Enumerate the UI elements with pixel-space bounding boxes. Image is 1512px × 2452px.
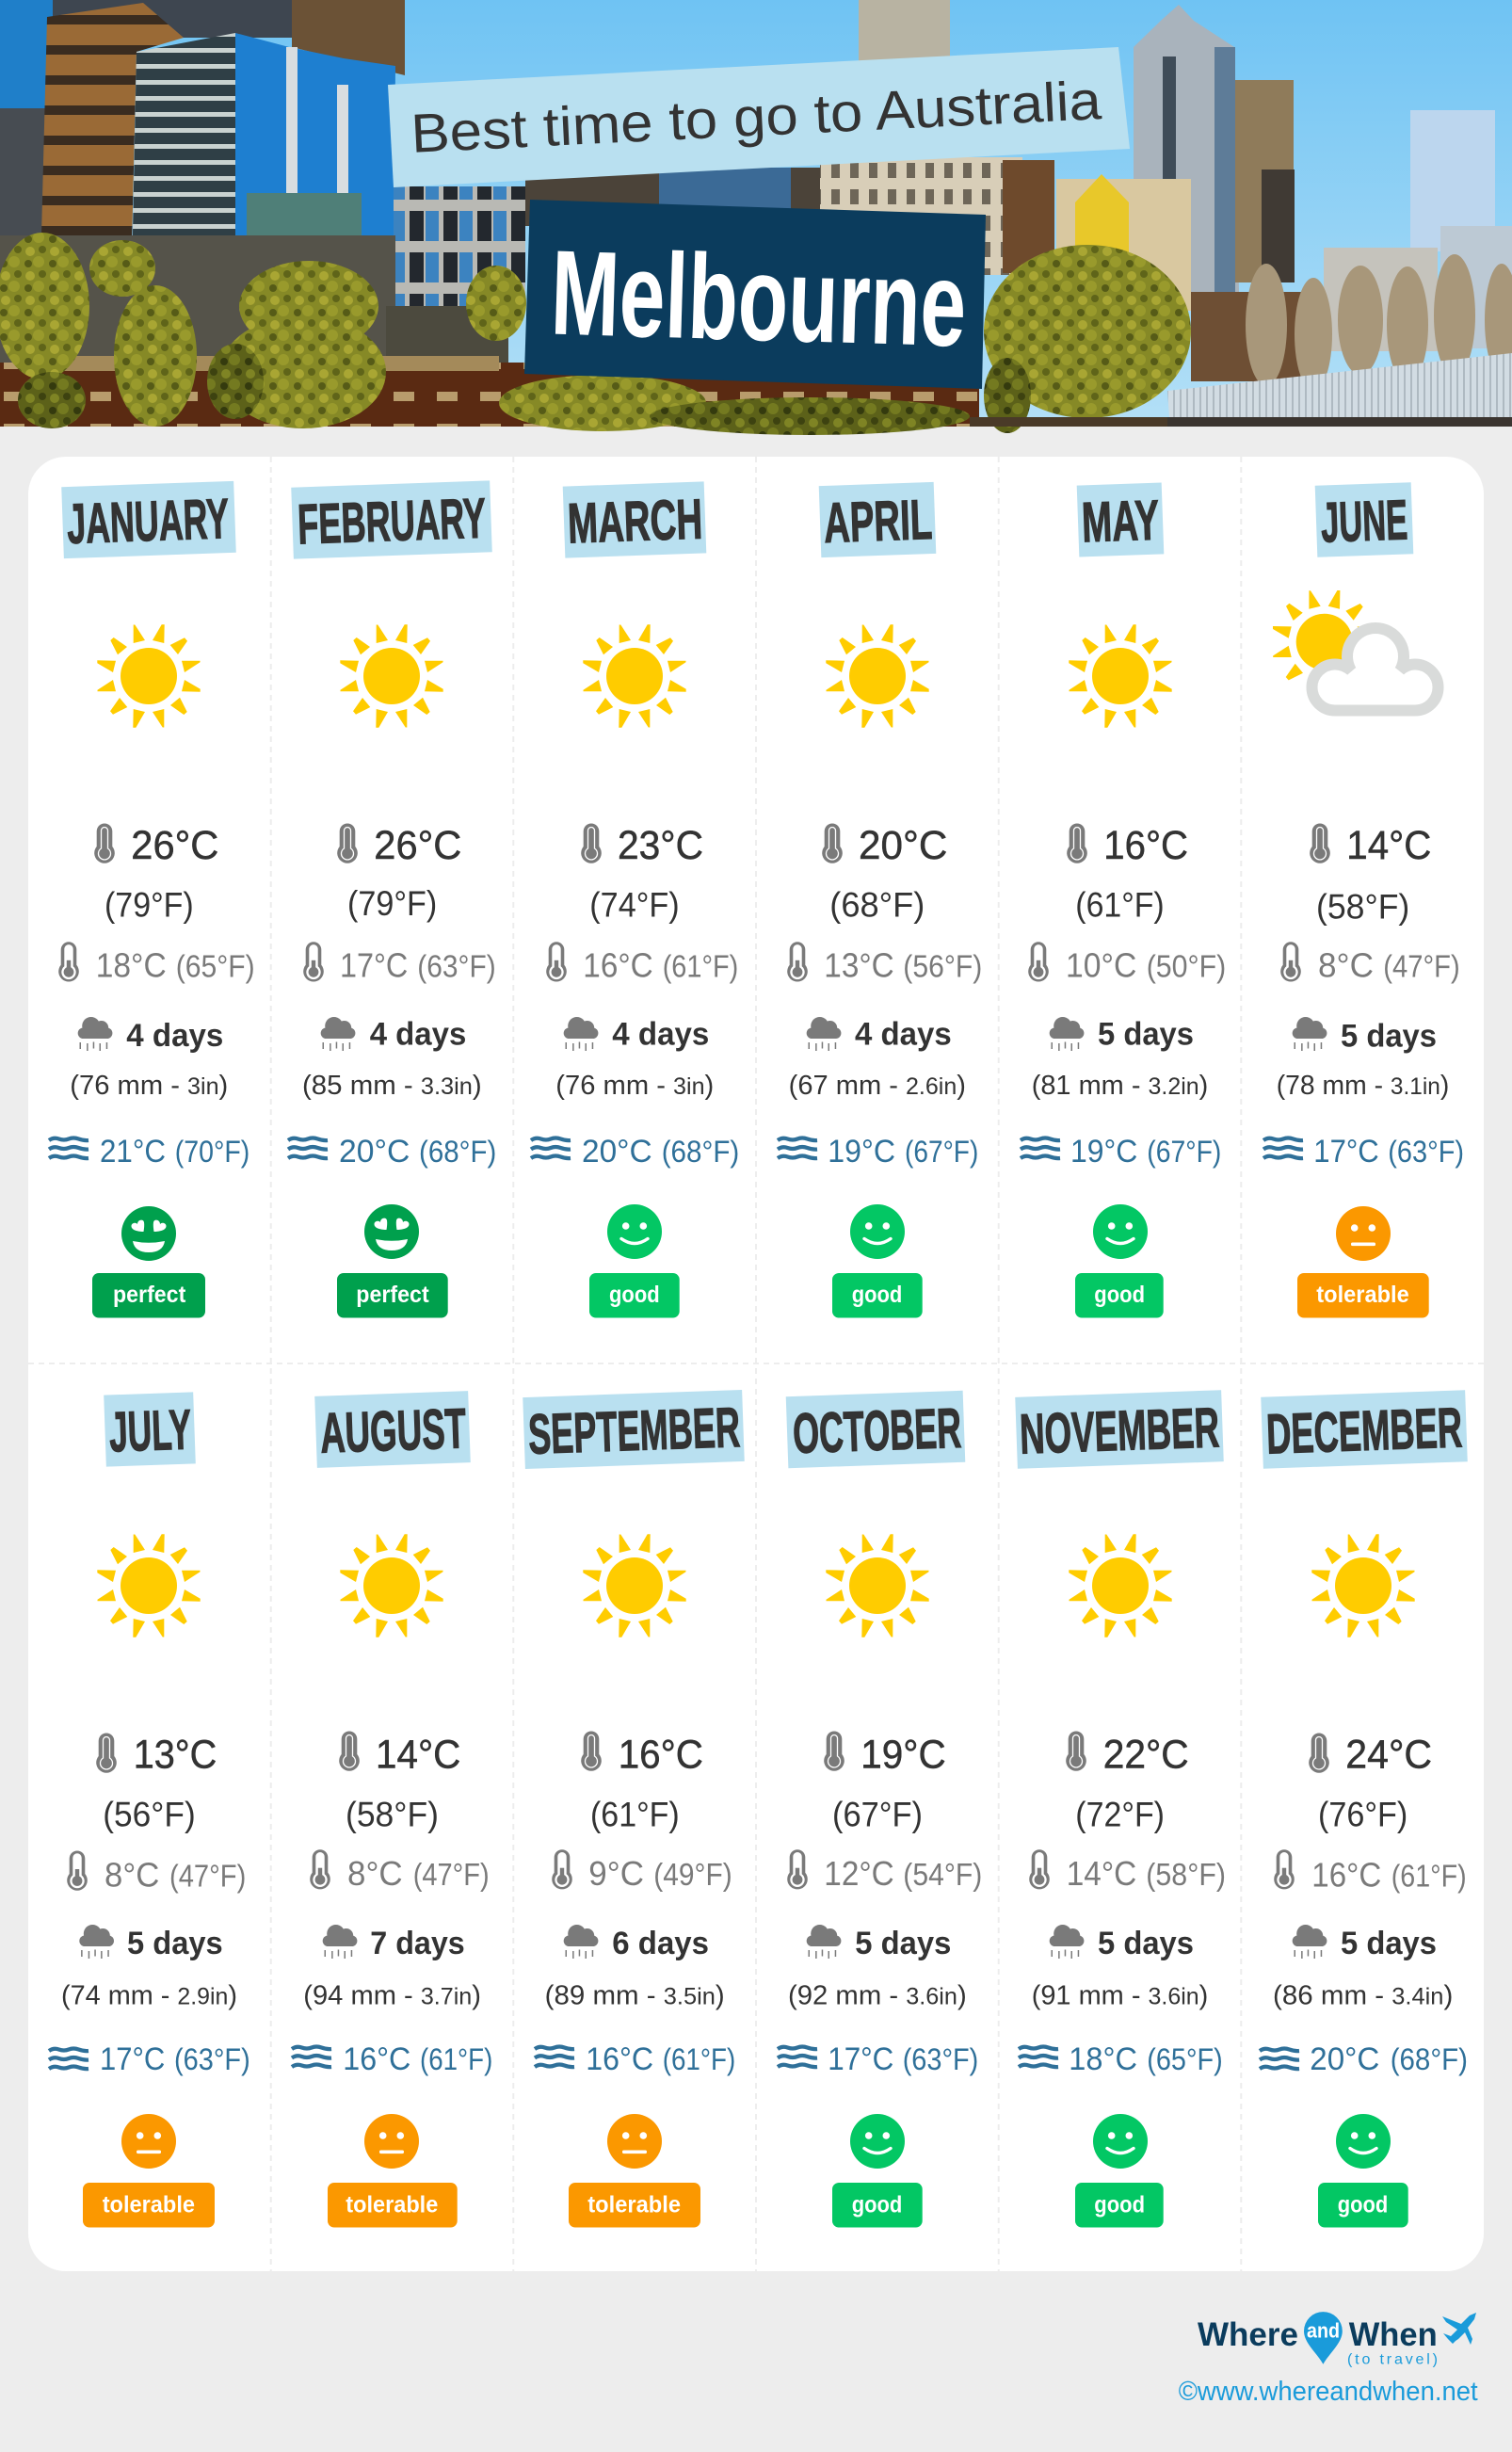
month heading — [563, 481, 706, 558]
month heading: AUGUST — [319, 1396, 467, 1465]
low temperature: 8°C — [1318, 945, 1374, 985]
title banner: Melbourne — [524, 200, 986, 389]
rating badge — [1075, 2183, 1164, 2228]
panel: January — [49, 481, 255, 1318]
low temperature fahrenheit: (47°F) — [169, 1859, 246, 1895]
rating badge — [92, 1273, 205, 1318]
sea temperature fahrenheit: (63°F) — [174, 2042, 250, 2076]
rainfall: (92 mm - 3.6in) — [788, 1981, 967, 2011]
month heading — [1015, 1390, 1224, 1469]
icon: low thermometer — [552, 1849, 572, 1889]
icon: rain cloud — [564, 1017, 598, 1051]
icon: sea waves — [1019, 2047, 1058, 2067]
high temperature fahrenheit: (74°F) — [589, 885, 680, 925]
icon: rain cloud — [323, 1925, 357, 1959]
rating badge — [589, 1273, 680, 1318]
high temperature: 16°C — [1103, 823, 1188, 868]
icon: high thermometer — [822, 823, 843, 863]
icon: rating face — [607, 1204, 662, 1259]
low temperature fahrenheit: (50°F) — [1147, 949, 1226, 985]
high temperature: 26°C — [131, 823, 218, 868]
panel: monthly climate card — [28, 457, 1484, 2271]
icon: sun — [583, 1534, 686, 1637]
high temperature fahrenheit: (76°F) — [1318, 1795, 1407, 1834]
rating badge: perfect — [356, 1282, 429, 1308]
rating badge: tolerable — [1316, 1282, 1409, 1308]
rainy days: 5 days — [1341, 1926, 1437, 1961]
sea temperature fahrenheit: (67°F) — [1147, 1135, 1221, 1169]
high temperature: 16°C — [619, 1733, 703, 1778]
icon: sun behind cloud — [1273, 590, 1439, 710]
rating badge — [569, 2183, 700, 2228]
low temperature fahrenheit: (65°F) — [176, 949, 255, 985]
month heading: JUNE — [1320, 488, 1408, 555]
low temperature: 16°C — [583, 945, 653, 985]
rating badge: good — [609, 1282, 660, 1308]
month heading: MARCH — [567, 488, 703, 555]
icon: sea waves — [49, 1137, 88, 1158]
rating badge — [1318, 2183, 1408, 2228]
month heading — [1315, 482, 1413, 557]
icon: rating face — [1336, 1206, 1391, 1261]
low temperature: 13°C — [824, 945, 894, 985]
rainfall: (67 mm - 2.6in) — [789, 1071, 966, 1101]
month heading — [786, 1391, 965, 1468]
icon: high thermometer — [1066, 1731, 1086, 1771]
high temperature: 14°C — [1346, 823, 1431, 868]
rating badge — [83, 2183, 215, 2228]
panel: April — [778, 482, 982, 1318]
logo tagline: (to travel) — [1347, 2352, 1438, 2367]
high temperature fahrenheit: (61°F) — [1075, 885, 1165, 925]
icon: rain cloud — [1050, 1925, 1084, 1959]
header photo: Melbourne skyline — [0, 0, 1512, 435]
sea temperature fahrenheit: (65°F) — [1147, 2042, 1223, 2076]
icon: sea waves — [778, 1137, 817, 1158]
icon: high thermometer — [581, 1731, 602, 1771]
low temperature: 14°C — [1067, 1854, 1136, 1893]
icon: sun — [340, 624, 443, 728]
rating badge: good — [1094, 2191, 1145, 2218]
sea temperature fahrenheit: (68°F) — [419, 1135, 496, 1169]
icon: rating face — [850, 2114, 905, 2169]
rainy days: 5 days — [855, 1926, 951, 1961]
icon: low thermometer — [67, 1851, 88, 1891]
month heading: FEBRUARY — [297, 487, 487, 556]
logo word: When: When — [1349, 2316, 1438, 2353]
rainfall: (74 mm - 2.9in) — [61, 1981, 237, 2011]
icon: rating face — [364, 1204, 419, 1259]
icon: low thermometer — [303, 942, 324, 982]
high temperature fahrenheit: (56°F) — [103, 1795, 196, 1834]
rating badge: good — [1094, 1282, 1145, 1308]
month heading: JULY — [108, 1397, 192, 1463]
month heading: APRIL — [823, 488, 933, 555]
icon: sea waves — [531, 1137, 571, 1158]
month heading — [104, 1392, 196, 1467]
sea temperature: 16°C — [586, 2041, 653, 2077]
icon: sun — [826, 624, 929, 728]
high temperature fahrenheit: (79°F) — [105, 885, 194, 925]
high temperature: 14°C — [376, 1733, 460, 1778]
month heading: OCTOBER — [792, 1396, 962, 1465]
rating badge: perfect — [113, 1282, 186, 1308]
icon: low thermometer — [1274, 1849, 1295, 1889]
icon: low thermometer — [1280, 942, 1301, 982]
month heading — [523, 1390, 745, 1469]
icon: sea waves — [49, 2049, 88, 2069]
low temperature: 9°C — [588, 1854, 644, 1893]
icon: low thermometer — [58, 942, 79, 982]
low temperature fahrenheit: (61°F) — [663, 949, 738, 985]
month heading — [1077, 482, 1164, 557]
icon: airplane — [1442, 2313, 1476, 2345]
high temperature fahrenheit: (67°F) — [832, 1795, 923, 1834]
icon: high thermometer — [1309, 1733, 1329, 1773]
high temperature: 20°C — [859, 823, 947, 868]
rainy days: 4 days — [855, 1017, 952, 1053]
sea temperature: 19°C — [1070, 1134, 1137, 1170]
high temperature fahrenheit: (79°F) — [347, 884, 437, 923]
icon: map pin — [1304, 2312, 1343, 2364]
rainfall: (86 mm - 3.4in) — [1273, 1981, 1453, 2011]
rainy days: 4 days — [612, 1017, 709, 1053]
high temperature fahrenheit: (58°F) — [1316, 887, 1409, 927]
icon: rain cloud — [79, 1925, 114, 1959]
panel: December — [1260, 1390, 1468, 2228]
website credit: ©www.whereandwhen.net — [1179, 2377, 1478, 2407]
icon: rain cloud — [807, 1925, 841, 1959]
sea temperature: 17°C — [1313, 1134, 1379, 1170]
rating badge — [1075, 1273, 1164, 1318]
sea temperature fahrenheit: (68°F) — [662, 1135, 739, 1169]
title banner: Melbourne: Melbourne — [549, 226, 968, 373]
icon: low thermometer — [787, 1849, 808, 1889]
icon: high thermometer — [96, 1733, 117, 1773]
icon: high thermometer — [1067, 823, 1087, 863]
rainy days: 5 days — [1341, 1019, 1437, 1055]
panel: March — [531, 481, 739, 1318]
rainy days: 5 days — [1098, 1926, 1194, 1961]
low temperature fahrenheit: (63°F) — [417, 949, 496, 985]
icon: low thermometer — [1028, 942, 1049, 982]
icon: high thermometer — [337, 823, 358, 863]
icon: sun — [583, 624, 686, 728]
icon: rating face — [850, 1204, 905, 1259]
icon: rain cloud — [564, 1925, 598, 1959]
logo: Where and When — [1198, 2312, 1476, 2367]
rainfall: (89 mm - 3.5in) — [545, 1981, 725, 2011]
icon: rating face — [121, 2114, 176, 2169]
low temperature fahrenheit: (61°F) — [1391, 1859, 1467, 1895]
rainfall: (94 mm - 3.7in) — [303, 1981, 481, 2011]
icon: sea waves — [778, 2047, 817, 2067]
panel: May — [1021, 482, 1226, 1318]
icon: rating face — [607, 2114, 662, 2169]
low temperature fahrenheit: (56°F) — [903, 949, 982, 985]
icon: rain cloud — [1050, 1017, 1084, 1051]
rating badge: good — [852, 1282, 902, 1308]
low temperature: 8°C — [347, 1854, 403, 1893]
month heading — [61, 481, 236, 558]
rating badge: tolerable — [103, 2191, 195, 2218]
rating badge: good — [1338, 2191, 1388, 2218]
rating badge: tolerable — [587, 2191, 681, 2218]
icon: low thermometer — [1029, 1849, 1050, 1889]
icon: rating face — [1336, 2114, 1391, 2169]
low temperature fahrenheit: (47°F) — [1383, 949, 1460, 985]
subtitle banner — [388, 47, 1130, 187]
low temperature: 16°C — [1311, 1855, 1381, 1895]
rainfall: (76 mm - 3in) — [70, 1071, 228, 1101]
icon: rating face — [121, 1206, 176, 1261]
sea temperature fahrenheit: (68°F) — [1391, 2042, 1468, 2076]
icon: sun — [826, 1534, 929, 1637]
sea temperature: 20°C — [582, 1134, 652, 1170]
sea temperature fahrenheit: (70°F) — [175, 1135, 249, 1169]
month heading: MAY — [1081, 489, 1160, 554]
icon: high thermometer — [824, 1731, 844, 1771]
icon: low thermometer — [310, 1849, 330, 1889]
icon: high thermometer — [339, 1731, 360, 1771]
sea temperature: 21°C — [100, 1134, 166, 1170]
icon: rating face — [1093, 2114, 1148, 2169]
month heading — [819, 482, 936, 557]
high temperature: 13°C — [134, 1733, 217, 1778]
panel: July — [49, 1392, 250, 2228]
icon: low thermometer — [546, 942, 567, 982]
low temperature: 18°C — [96, 945, 167, 985]
high temperature fahrenheit: (61°F) — [590, 1795, 680, 1834]
month heading: SEPTEMBER — [527, 1395, 741, 1466]
subtitle banner: Best time to go to Australia — [410, 70, 1103, 165]
panel: August — [292, 1391, 492, 2228]
panel: September — [523, 1390, 745, 2228]
icon: rating face — [364, 2114, 419, 2169]
low temperature: 17°C — [340, 945, 408, 985]
month heading: NOVEMBER — [1019, 1395, 1220, 1466]
icon: rain cloud — [321, 1017, 355, 1051]
sea temperature: 19°C — [828, 1134, 895, 1170]
icon: sun — [1311, 1534, 1415, 1637]
low temperature fahrenheit: (54°F) — [903, 1858, 982, 1893]
high temperature: 23°C — [618, 823, 703, 868]
high temperature fahrenheit: (72°F) — [1075, 1795, 1165, 1834]
rainy days: 7 days — [370, 1926, 465, 1961]
month heading — [314, 1391, 471, 1468]
rainfall: (78 mm - 3.1in) — [1277, 1071, 1449, 1101]
sea temperature: 20°C — [1310, 2041, 1379, 2077]
month heading — [291, 480, 492, 559]
icon: sun — [340, 1534, 443, 1637]
high temperature fahrenheit: (68°F) — [829, 885, 925, 925]
panel: November — [1015, 1390, 1226, 2228]
sea temperature fahrenheit: (63°F) — [1388, 1135, 1464, 1169]
rainy days: 6 days — [612, 1926, 709, 1961]
icon: sea waves — [1260, 2049, 1299, 2069]
icon: sea waves — [535, 2047, 574, 2067]
high temperature: 26°C — [374, 823, 461, 868]
rating badge — [328, 2183, 458, 2228]
column and row dividers — [28, 457, 1484, 2271]
sea temperature fahrenheit: (61°F) — [663, 2042, 735, 2076]
sea temperature: 17°C — [100, 2041, 165, 2077]
icon: rating face — [1093, 1204, 1148, 1259]
sea temperature: 20°C — [339, 1134, 410, 1170]
icon: rain cloud — [1293, 1925, 1327, 1959]
rating badge — [337, 1273, 448, 1318]
icon: rain cloud — [1293, 1017, 1327, 1051]
high temperature: 22°C — [1103, 1733, 1189, 1778]
low temperature: 10°C — [1066, 945, 1136, 985]
icon: sea waves — [288, 1137, 328, 1158]
high temperature fahrenheit: (58°F) — [346, 1795, 439, 1834]
rainfall: (81 mm - 3.2in) — [1032, 1071, 1208, 1101]
low temperature fahrenheit: (49°F) — [653, 1858, 732, 1893]
rating badge: tolerable — [346, 2191, 438, 2218]
rainfall: (85 mm - 3.3in) — [302, 1071, 482, 1101]
icon: sea waves — [1021, 1137, 1060, 1158]
icon: high thermometer — [1310, 823, 1330, 863]
rainfall: (76 mm - 3in) — [555, 1071, 714, 1101]
sea temperature fahrenheit: (63°F) — [903, 2042, 978, 2076]
icon: sun — [97, 624, 201, 728]
icon: low thermometer — [787, 942, 808, 982]
icon: high thermometer — [94, 823, 115, 863]
icon: sun — [1069, 1534, 1172, 1637]
logo word: Where: Where — [1198, 2316, 1298, 2353]
low temperature: 12°C — [824, 1854, 894, 1893]
icon: sun — [97, 1534, 201, 1637]
rainy days: 5 days — [1098, 1017, 1194, 1053]
icon: sea waves — [292, 2047, 331, 2067]
icon: rain cloud — [807, 1017, 841, 1051]
rating badge: good — [852, 2191, 902, 2218]
panel: February — [288, 480, 496, 1318]
icon: sea waves — [1263, 1137, 1303, 1158]
sea temperature: 16°C — [343, 2041, 410, 2077]
rating badge — [832, 2183, 923, 2228]
sea temperature: 17°C — [828, 2041, 893, 2077]
high temperature: 24°C — [1345, 1733, 1432, 1778]
sea temperature fahrenheit: (67°F) — [905, 1135, 978, 1169]
rating badge — [1297, 1273, 1429, 1318]
icon: sun — [1069, 624, 1172, 728]
logo word: and: and — [1307, 2319, 1340, 2343]
rainy days: 5 days — [127, 1926, 223, 1961]
rainy days: 4 days — [126, 1018, 223, 1054]
rating badge — [832, 1273, 923, 1318]
month heading: JANUARY — [66, 487, 230, 556]
icon: rain cloud — [78, 1017, 112, 1051]
rainy days: 4 days — [370, 1017, 466, 1053]
low temperature fahrenheit: (47°F) — [413, 1858, 490, 1893]
high temperature: 19°C — [861, 1733, 946, 1778]
low temperature: 8°C — [105, 1855, 159, 1895]
panel: June — [1263, 482, 1464, 1318]
rainfall: (91 mm - 3.6in) — [1032, 1981, 1208, 2011]
panel: October — [778, 1391, 982, 2228]
icon: high thermometer — [581, 823, 602, 863]
sea temperature fahrenheit: (61°F) — [420, 2042, 492, 2076]
sea temperature: 18°C — [1069, 2041, 1137, 2077]
low temperature fahrenheit: (58°F) — [1146, 1858, 1226, 1893]
